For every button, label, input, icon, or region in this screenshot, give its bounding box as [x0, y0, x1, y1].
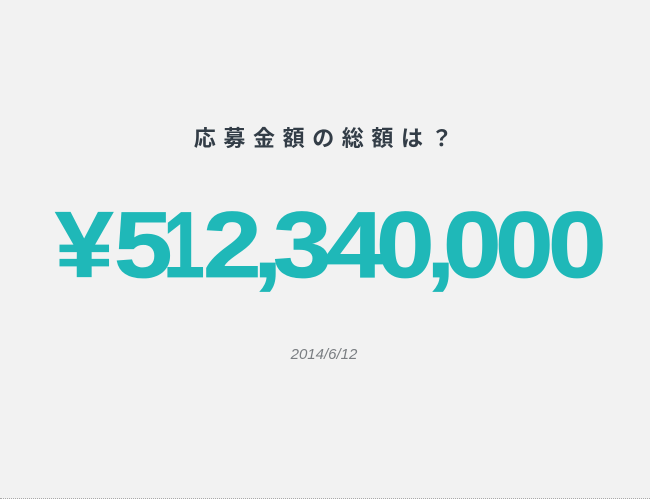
- total amount: 0: [495, 192, 554, 297]
- total amount: [54, 192, 607, 297]
- total amount: 0: [376, 192, 435, 297]
- dotted bottom border: [0, 498, 650, 499]
- total amount: 0: [548, 192, 607, 297]
- total amount: ,: [253, 192, 282, 297]
- date: 2014/6/12: [291, 346, 357, 363]
- total amount: ,: [426, 192, 455, 297]
- total amount: 0: [443, 192, 502, 297]
- total amount: 3: [273, 192, 332, 297]
- total amount: 1: [163, 192, 205, 297]
- title: 応募金額の総額は？: [194, 126, 460, 151]
- total amount: 2: [203, 192, 262, 297]
- total amount: 4: [326, 192, 385, 297]
- total amount: ¥: [55, 192, 114, 297]
- total amount: 5: [114, 192, 173, 297]
